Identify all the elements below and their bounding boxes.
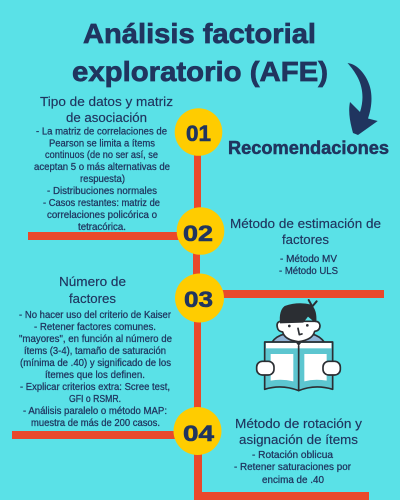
panel: step 01 text: - Distribuciones normales: [47, 186, 157, 197]
icon: person reading a book: [257, 300, 340, 391]
panel: step 03 text: ítems (3-4), tamaño de saturación: [24, 346, 166, 357]
arrow: curved arrow pointing to recommendations: [348, 63, 378, 135]
step 02 badge: [177, 207, 224, 255]
panel: step 01 text: - Casos restantes: matriz de: [43, 198, 161, 209]
step 01 badge: 01: [186, 121, 211, 146]
title: Análisis factorial: [83, 18, 316, 49]
panel: step 03 text: - Explicar criterios extra: Scree test,: [20, 382, 170, 393]
panel: step 01 text: [34, 95, 173, 233]
panel: step 04 text: encima de .40: [262, 475, 325, 486]
panel: step 03 text: ítemes que los definen.: [45, 370, 145, 381]
step 03 badge: [175, 274, 224, 322]
panel: step 01 text: correlaciones policórica o: [47, 210, 158, 221]
panel: step 01 text: continuos (de no ser así, se: [45, 150, 159, 161]
panel: step 04 text: asignación de ítems: [239, 433, 358, 447]
timeline lines: [12, 150, 384, 500]
panel: step 01 text: tetracórica.: [78, 222, 126, 233]
step 03 badge: 03: [184, 287, 213, 312]
panel: step 01 text: - La matriz de correlaciones de: [36, 126, 168, 138]
title: exploratorio (AFE): [72, 56, 328, 87]
title: [72, 18, 328, 87]
panel: step 03 text: "mayores", en función al número de: [19, 334, 173, 345]
panel: step 04 text: - Retener saturaciones por: [234, 462, 352, 473]
panel: step 03 text: [19, 275, 173, 429]
panel: step 01 text: respuesta): [80, 174, 125, 185]
panel: step 03 text: - Retener factores comunes.: [34, 322, 156, 333]
panel: step 02 text: - Método MV: [280, 254, 337, 265]
panel: step 02 text: - Método ULS: [279, 266, 338, 277]
panel: step 03 text: (mínima de .40) y significado de los: [20, 358, 171, 369]
panel: step 03 text: Número de: [59, 275, 126, 289]
panel: step 01 text: Pearson se limita a ítems: [49, 138, 155, 150]
heading: recomendaciones: Recomendaciones: [228, 138, 389, 158]
panel: step 01 text: de asociación: [66, 111, 147, 125]
panel: step 01 text: Tipo de datos y matriz: [40, 95, 173, 109]
panel: step 02 text: factores: [282, 233, 329, 247]
panel: step 03 text: muestra de más de 200 casos.: [31, 418, 160, 429]
panel: step 02 text: Método de estimación de: [230, 217, 381, 231]
panel: step 04 text: Método de rotación y: [235, 417, 363, 431]
panel: step 02 text: [230, 217, 381, 277]
panel: step 04 text: [234, 417, 363, 486]
step 01 badge: [175, 108, 222, 156]
panel: step 03 text: - No hacer uso del criterio de Kaiser: [19, 310, 172, 321]
panel: step 01 text: aceptan 5 o más alternativas de: [34, 162, 171, 173]
step 02 badge: 02: [183, 221, 213, 246]
panel: step 03 text: GFI o RSMR.: [69, 394, 121, 405]
panel: step 03 text: factores: [69, 292, 116, 306]
panel: step 03 text: - Análisis paralelo o método MAP:: [23, 406, 167, 417]
step 04 badge: [174, 407, 222, 455]
panel: step 04 text: - Rotación oblicua: [252, 450, 334, 461]
step 04 badge: 04: [183, 421, 215, 446]
